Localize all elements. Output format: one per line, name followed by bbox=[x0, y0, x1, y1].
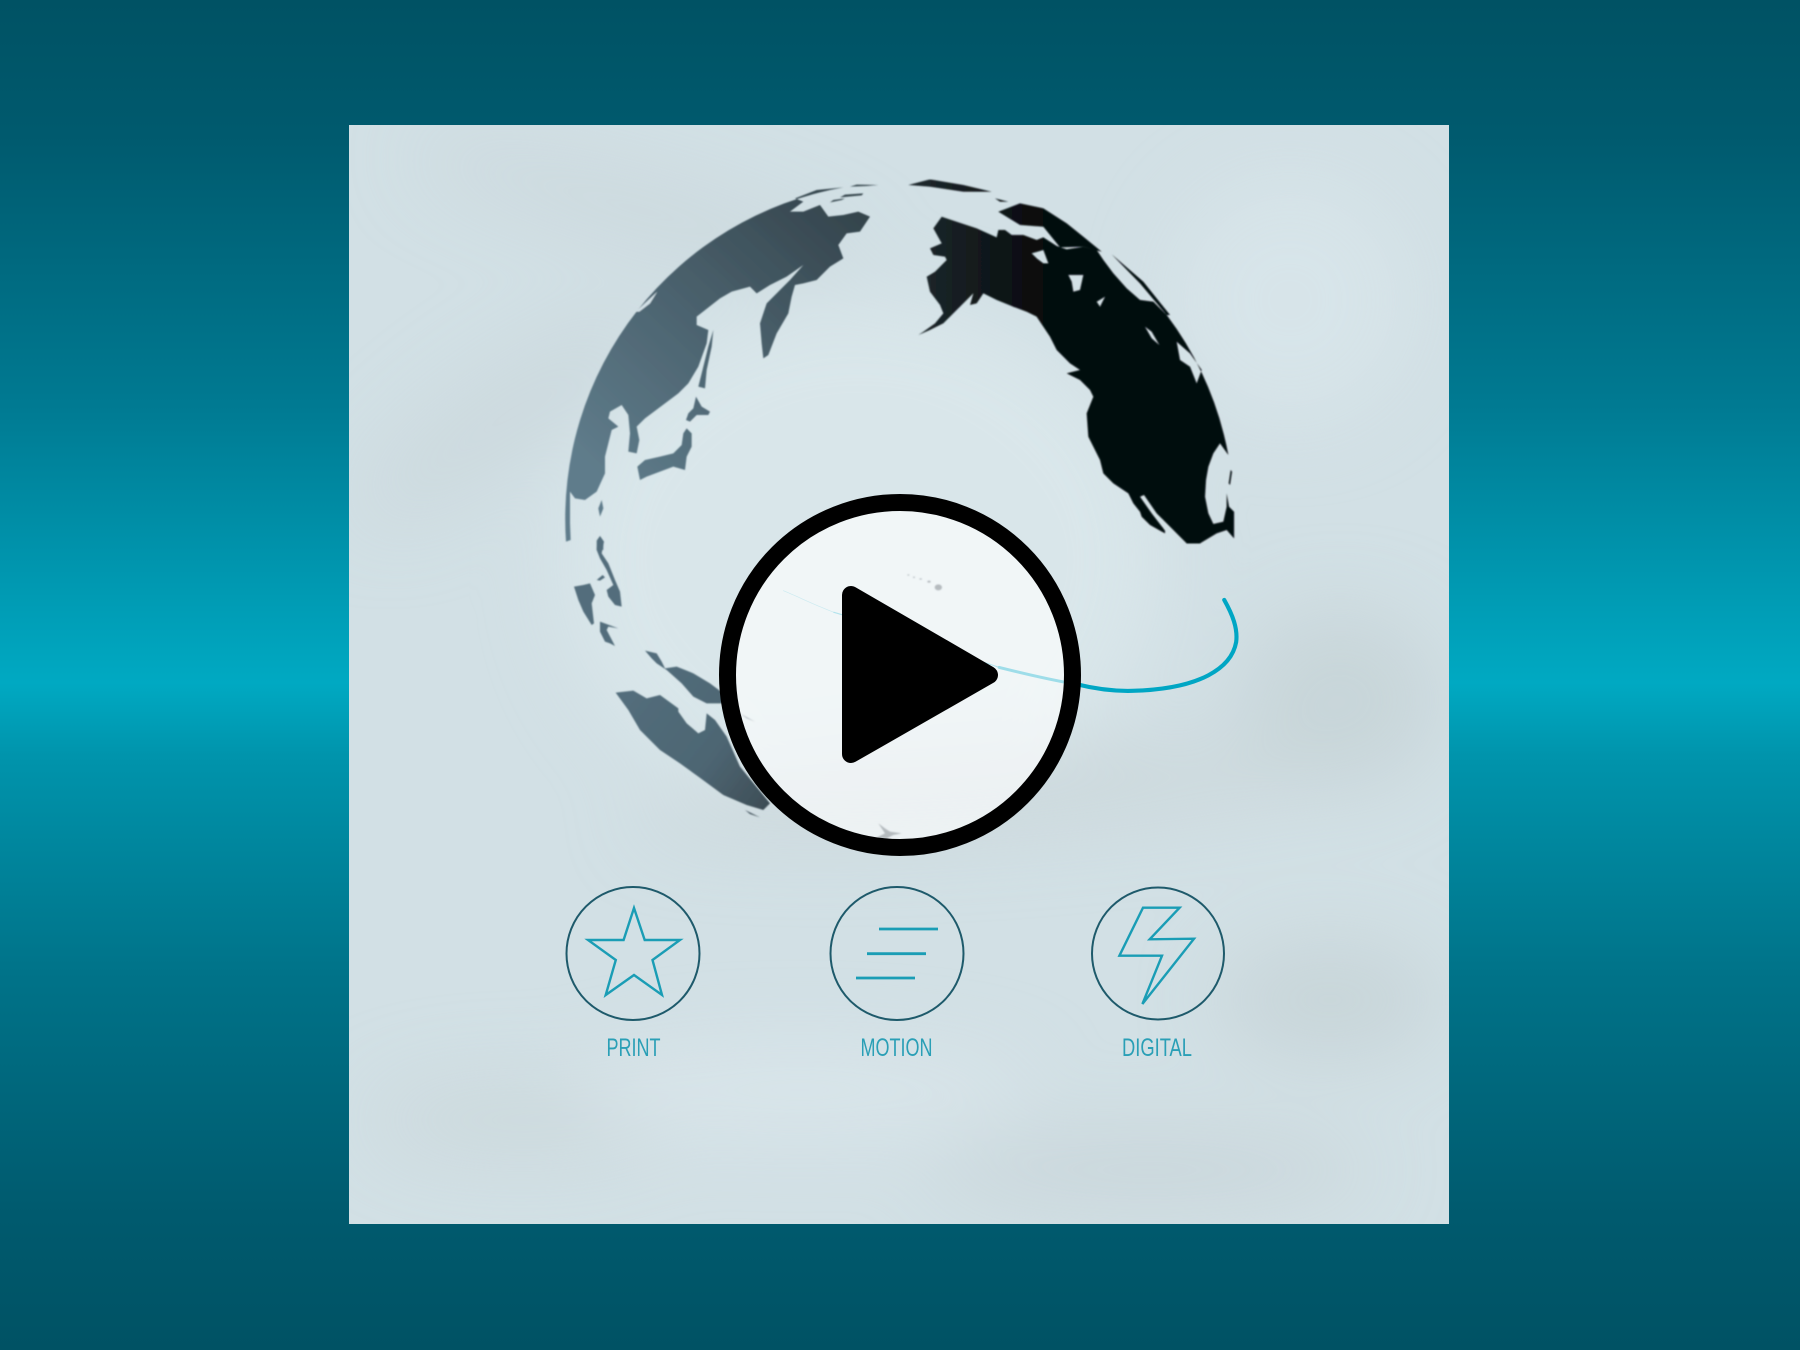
play triangle bbox=[851, 595, 989, 754]
landmass: North America bbox=[908, 179, 1234, 543]
landmass: Asia bbox=[565, 185, 878, 550]
icon group: digital bbox=[1092, 888, 1224, 1062]
icon group: motion bbox=[830, 887, 964, 1062]
icon group: print bbox=[566, 887, 700, 1062]
label: print: PRINT bbox=[606, 1034, 660, 1062]
globe bbox=[565, 179, 1234, 838]
icon: lightning bolt in circle bbox=[1092, 888, 1224, 1020]
route line: teal curve around the globe bbox=[783, 591, 1237, 691]
label: digital: DIGITAL bbox=[1122, 1034, 1192, 1062]
play button bbox=[728, 502, 1072, 848]
play button disc and ring bbox=[728, 502, 1072, 848]
label: motion: MOTION bbox=[860, 1034, 932, 1062]
landmass: Southeast Asia and Australia bbox=[574, 536, 942, 838]
icon: speed lines in circle bbox=[830, 887, 964, 1020]
icon: star in circle bbox=[566, 887, 700, 1020]
panel: pale card bbox=[335, 117, 1449, 1224]
